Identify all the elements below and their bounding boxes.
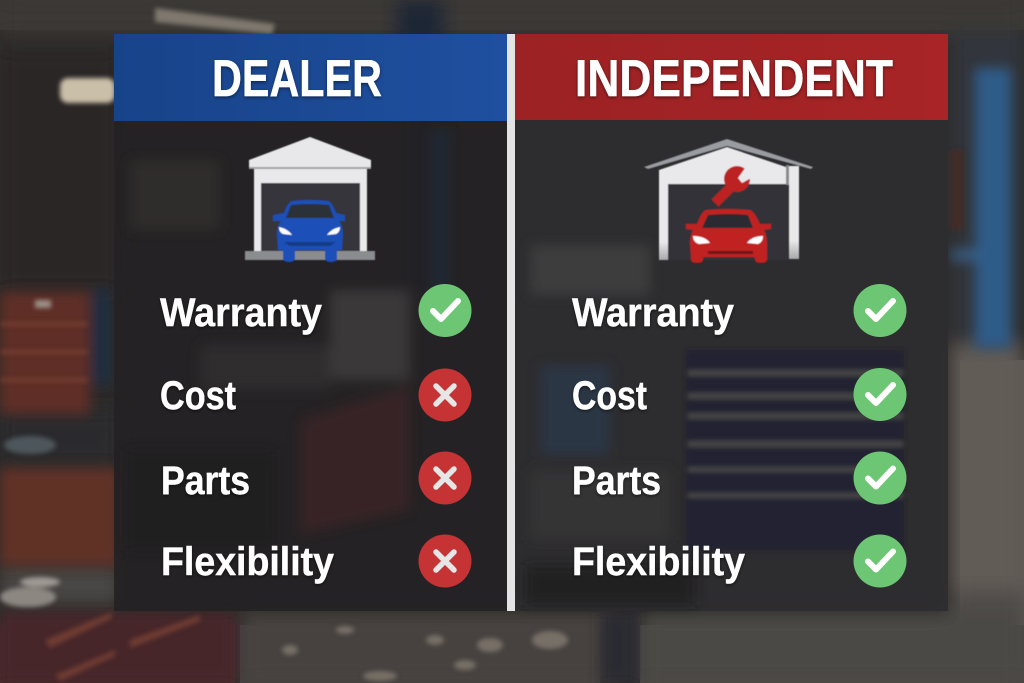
panel: independent body xyxy=(515,120,948,611)
icon: check xyxy=(854,368,906,421)
list: dealer labels: Warranty xyxy=(160,291,323,335)
list: independent labels: Warranty xyxy=(572,291,735,335)
icon: independent garage with wrench and red car xyxy=(644,139,813,263)
icon: check xyxy=(418,284,472,337)
header: independent xyxy=(515,34,948,120)
heading: INDEPENDENT: INDEPENDENT xyxy=(575,50,893,108)
icon: cross xyxy=(418,368,472,422)
icons: independent status marks xyxy=(854,284,906,588)
header: dealer xyxy=(114,34,507,121)
list: independent labels xyxy=(572,291,746,584)
list: independent labels: Parts xyxy=(572,459,661,503)
list: dealer labels: Flexibility xyxy=(161,540,335,584)
center divider xyxy=(507,34,515,611)
icon: check xyxy=(854,534,906,588)
list: independent labels: Flexibility xyxy=(572,540,746,584)
panel: dealer body xyxy=(114,120,507,611)
heading: DEALER: DEALER xyxy=(212,50,382,108)
icon: wrench xyxy=(715,164,753,203)
icon: check xyxy=(854,284,906,337)
list: dealer labels: Cost xyxy=(160,374,236,418)
icon: check xyxy=(854,452,906,504)
icon: cross xyxy=(418,452,472,504)
icon: cross xyxy=(418,534,472,588)
list: dealer labels xyxy=(160,291,335,584)
list: independent labels: Cost xyxy=(572,374,647,418)
icon: dealer garage with blue car xyxy=(245,137,375,262)
icons: dealer status marks xyxy=(418,284,472,588)
list: dealer labels: Parts xyxy=(161,459,250,503)
icon: red car xyxy=(686,209,771,263)
